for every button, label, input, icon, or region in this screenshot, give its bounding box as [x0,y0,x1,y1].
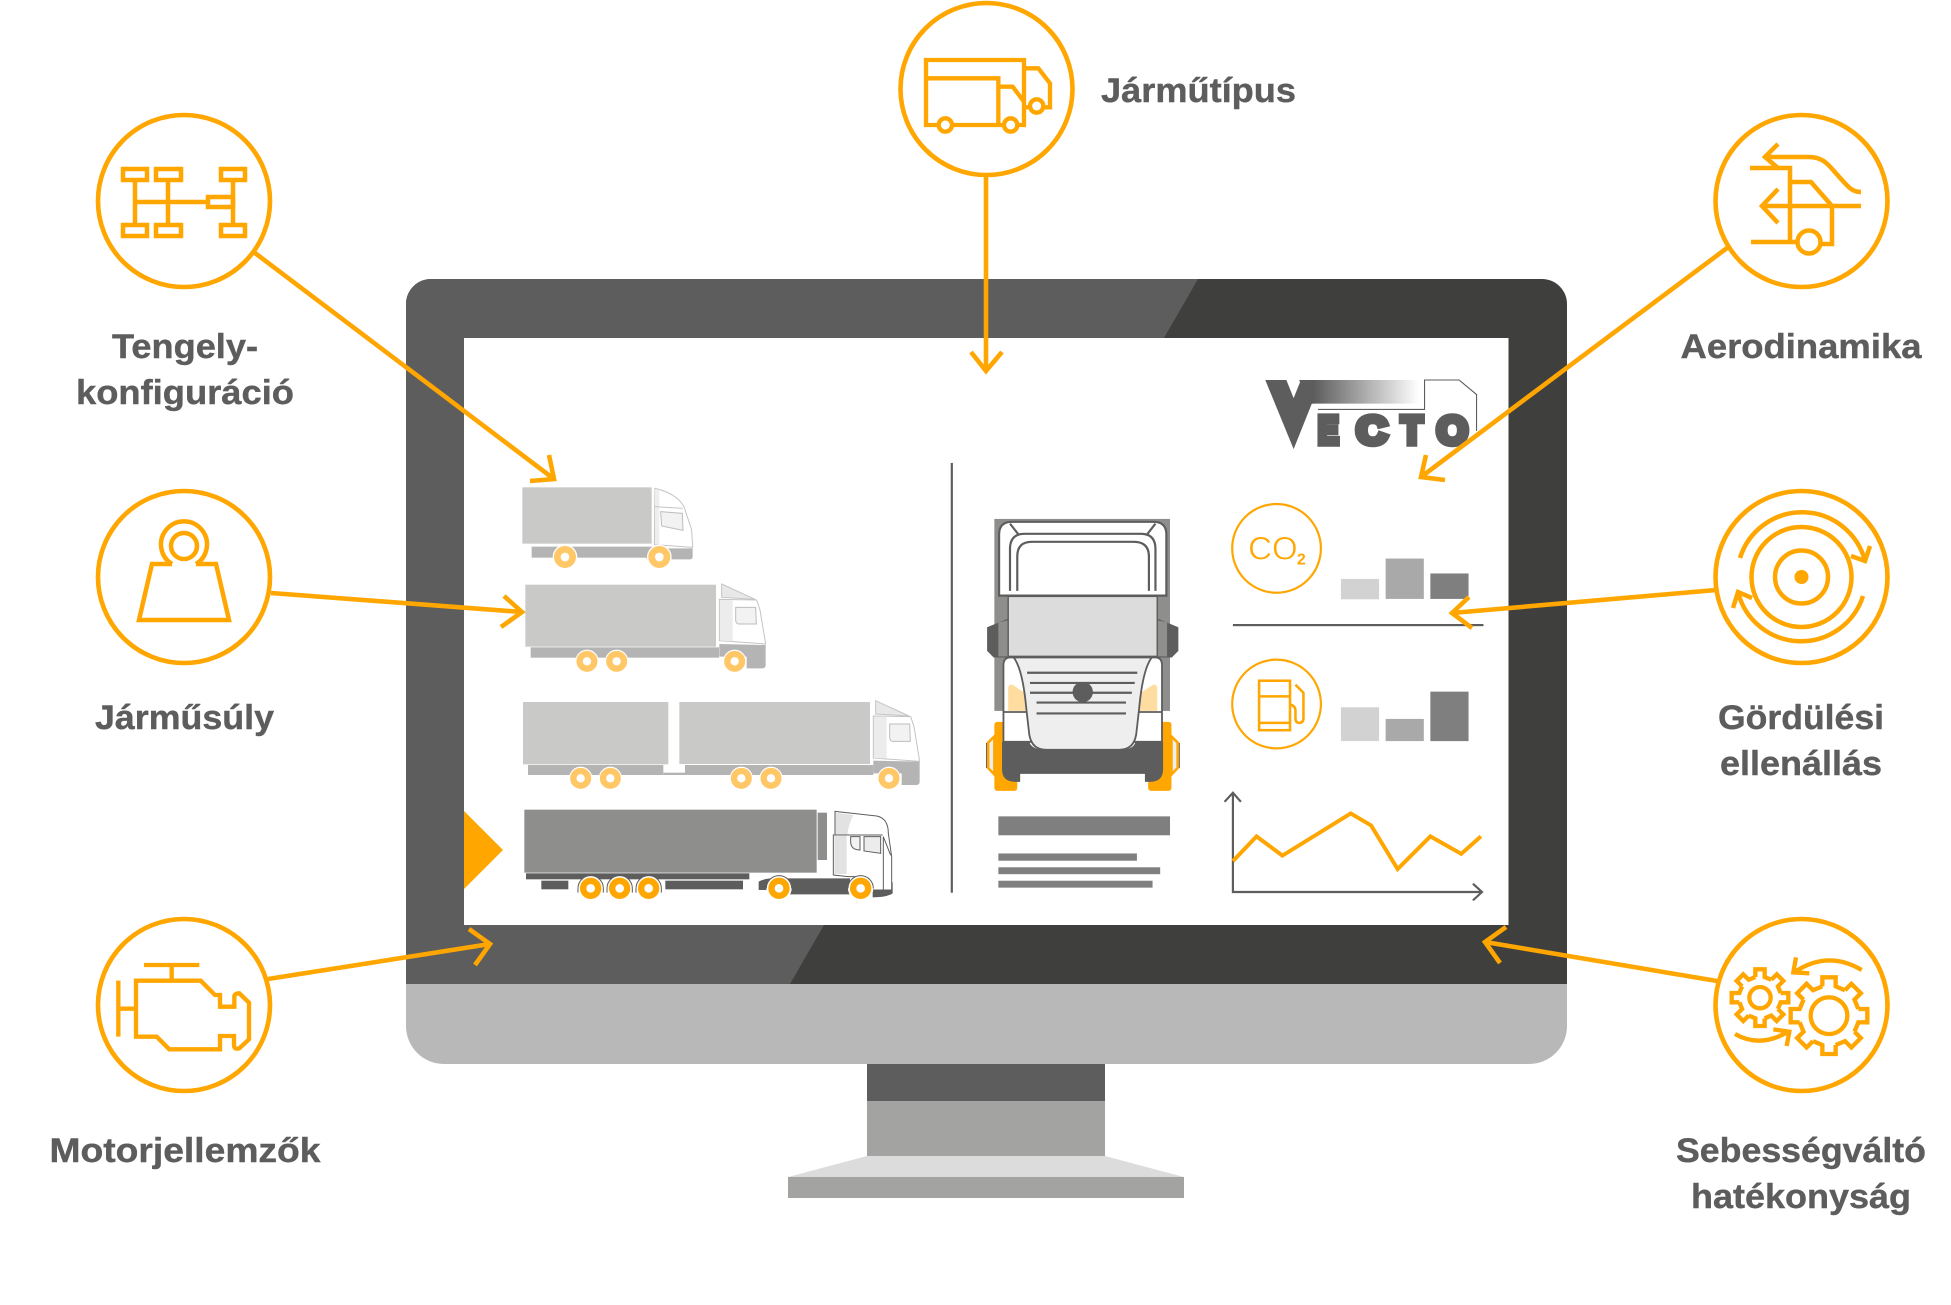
icon: vehicle type [900,3,1072,175]
bar chart: CO2 [1341,559,1469,599]
label: aerodynamics: Aerodinamika [1680,328,1923,366]
VECTO logo: E [1318,409,1339,452]
label: rolling resistance: Gördülési [1718,699,1884,737]
truck 3 road train [523,701,920,790]
panel: results [951,380,1483,900]
icon: engine [98,919,270,1091]
monitor chin [406,984,1567,1064]
icon: CO2 [1232,504,1321,593]
text placeholder lines [998,816,1170,888]
label: gearbox: Sebességváltó [1676,1132,1926,1170]
label: vehicle mass: Járműsúly [95,699,274,737]
VECTO logo: O [1437,410,1468,452]
label: gearbox [1676,1132,1926,1216]
vertical divider [951,463,953,893]
screen [464,338,1508,925]
label: vehicle type: Járműtípus [1101,72,1296,110]
arrow: vehicle mass [271,593,522,627]
VECTO logo: C [1357,408,1387,452]
icon: CO2: 2 [1297,551,1306,568]
monitor bezel [406,279,1567,984]
label: axle configuration: konfiguráció [76,374,294,412]
selected truck marker [464,811,503,889]
icon: gearbox [1716,919,1888,1091]
arrow: engine [268,929,490,979]
truck 1 rigid two axle [522,487,693,569]
icon: vehicle mass [98,491,270,663]
label: axle configuration: Tengely- [112,328,258,366]
icon: fuel pump [1232,660,1321,748]
label: rolling resistance: ellenállás [1720,745,1882,783]
label: rolling resistance [1718,699,1884,783]
label: axle configuration [76,328,294,412]
label: gearbox: hatékonyság [1691,1178,1911,1216]
label: engine: Motorjellemzők [50,1132,321,1170]
line chart [1225,793,1482,900]
icon: axle configuration [98,115,270,287]
truck front view [987,519,1179,791]
arrow: vehicle type [971,175,1002,371]
arrow: rolling resistance [1452,590,1716,628]
VECTO logo [1265,380,1477,452]
arrow: axle configuration [255,253,554,481]
VECTO logo: T [1401,409,1422,452]
icon: aerodynamics [1716,115,1888,287]
icon: rolling resistance [1716,491,1888,663]
panel: truck list [522,487,920,901]
bar chart: fuel [1341,692,1469,741]
arrow: gearbox [1485,927,1717,981]
icon: CO2: CO [1248,529,1298,566]
monitor [406,279,1567,1198]
arrow: aerodynamics [1421,248,1727,480]
horizontal divider [1233,624,1483,626]
truck 2 rigid three axle [525,584,766,673]
truck 4 semi-trailer highlighted [524,810,893,901]
monitor stand [788,1064,1184,1198]
